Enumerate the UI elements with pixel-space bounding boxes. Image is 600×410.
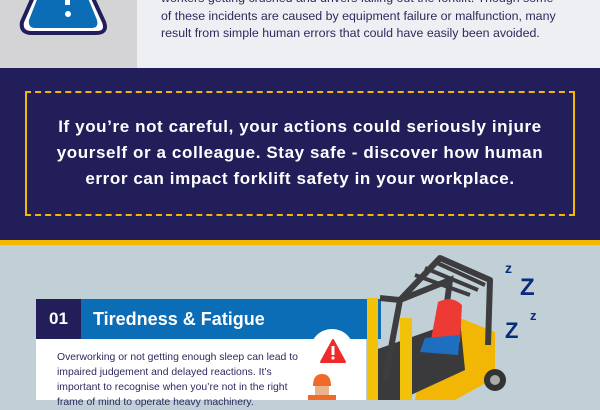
illustration: forklift: z: [505, 260, 512, 276]
body text: important to recognise when you’re not in the right: [57, 382, 287, 393]
callout text: yourself or a colleague. Stay safe - discover how human: [57, 143, 543, 162]
callout text: If you’re not careful, your actions could seriously injure: [58, 117, 542, 136]
illustration: forklift: Z: [505, 318, 518, 343]
intro text: [161, 0, 556, 40]
illustration: forklift: [367, 255, 537, 400]
callout text: [56, 117, 543, 188]
panel: tiredness card: [36, 299, 366, 400]
icon: warning triangle: [20, 0, 107, 35]
callout: dashed box: [25, 91, 575, 216]
navy callout band: [0, 68, 600, 240]
illustration: forklift: z: [530, 308, 537, 323]
body text: impaired judgement and delayed reactions. It’s: [57, 367, 272, 378]
body text: [57, 352, 298, 408]
icon: warning + worker: [308, 329, 350, 400]
heading number: [36, 299, 81, 339]
intro text: result from simple human errors that could have easily been avoided.: [161, 26, 540, 40]
body text: frame of mind to operate heavy machinery.: [57, 397, 254, 408]
heading: [81, 299, 381, 339]
illustration: forklift: Z: [520, 274, 535, 301]
intro text: of these incidents are caused by equipment failure or malfunction, many: [161, 8, 556, 22]
icon panel: [0, 0, 137, 68]
heading number: 01: [49, 309, 68, 328]
body text: Overworking or not getting enough sleep can lead to: [57, 352, 298, 363]
top intro panel: [0, 0, 600, 68]
heading: Tiredness & Fatigue: [93, 309, 265, 329]
callout text: error can impact forklift safety in your workplace.: [85, 169, 515, 188]
